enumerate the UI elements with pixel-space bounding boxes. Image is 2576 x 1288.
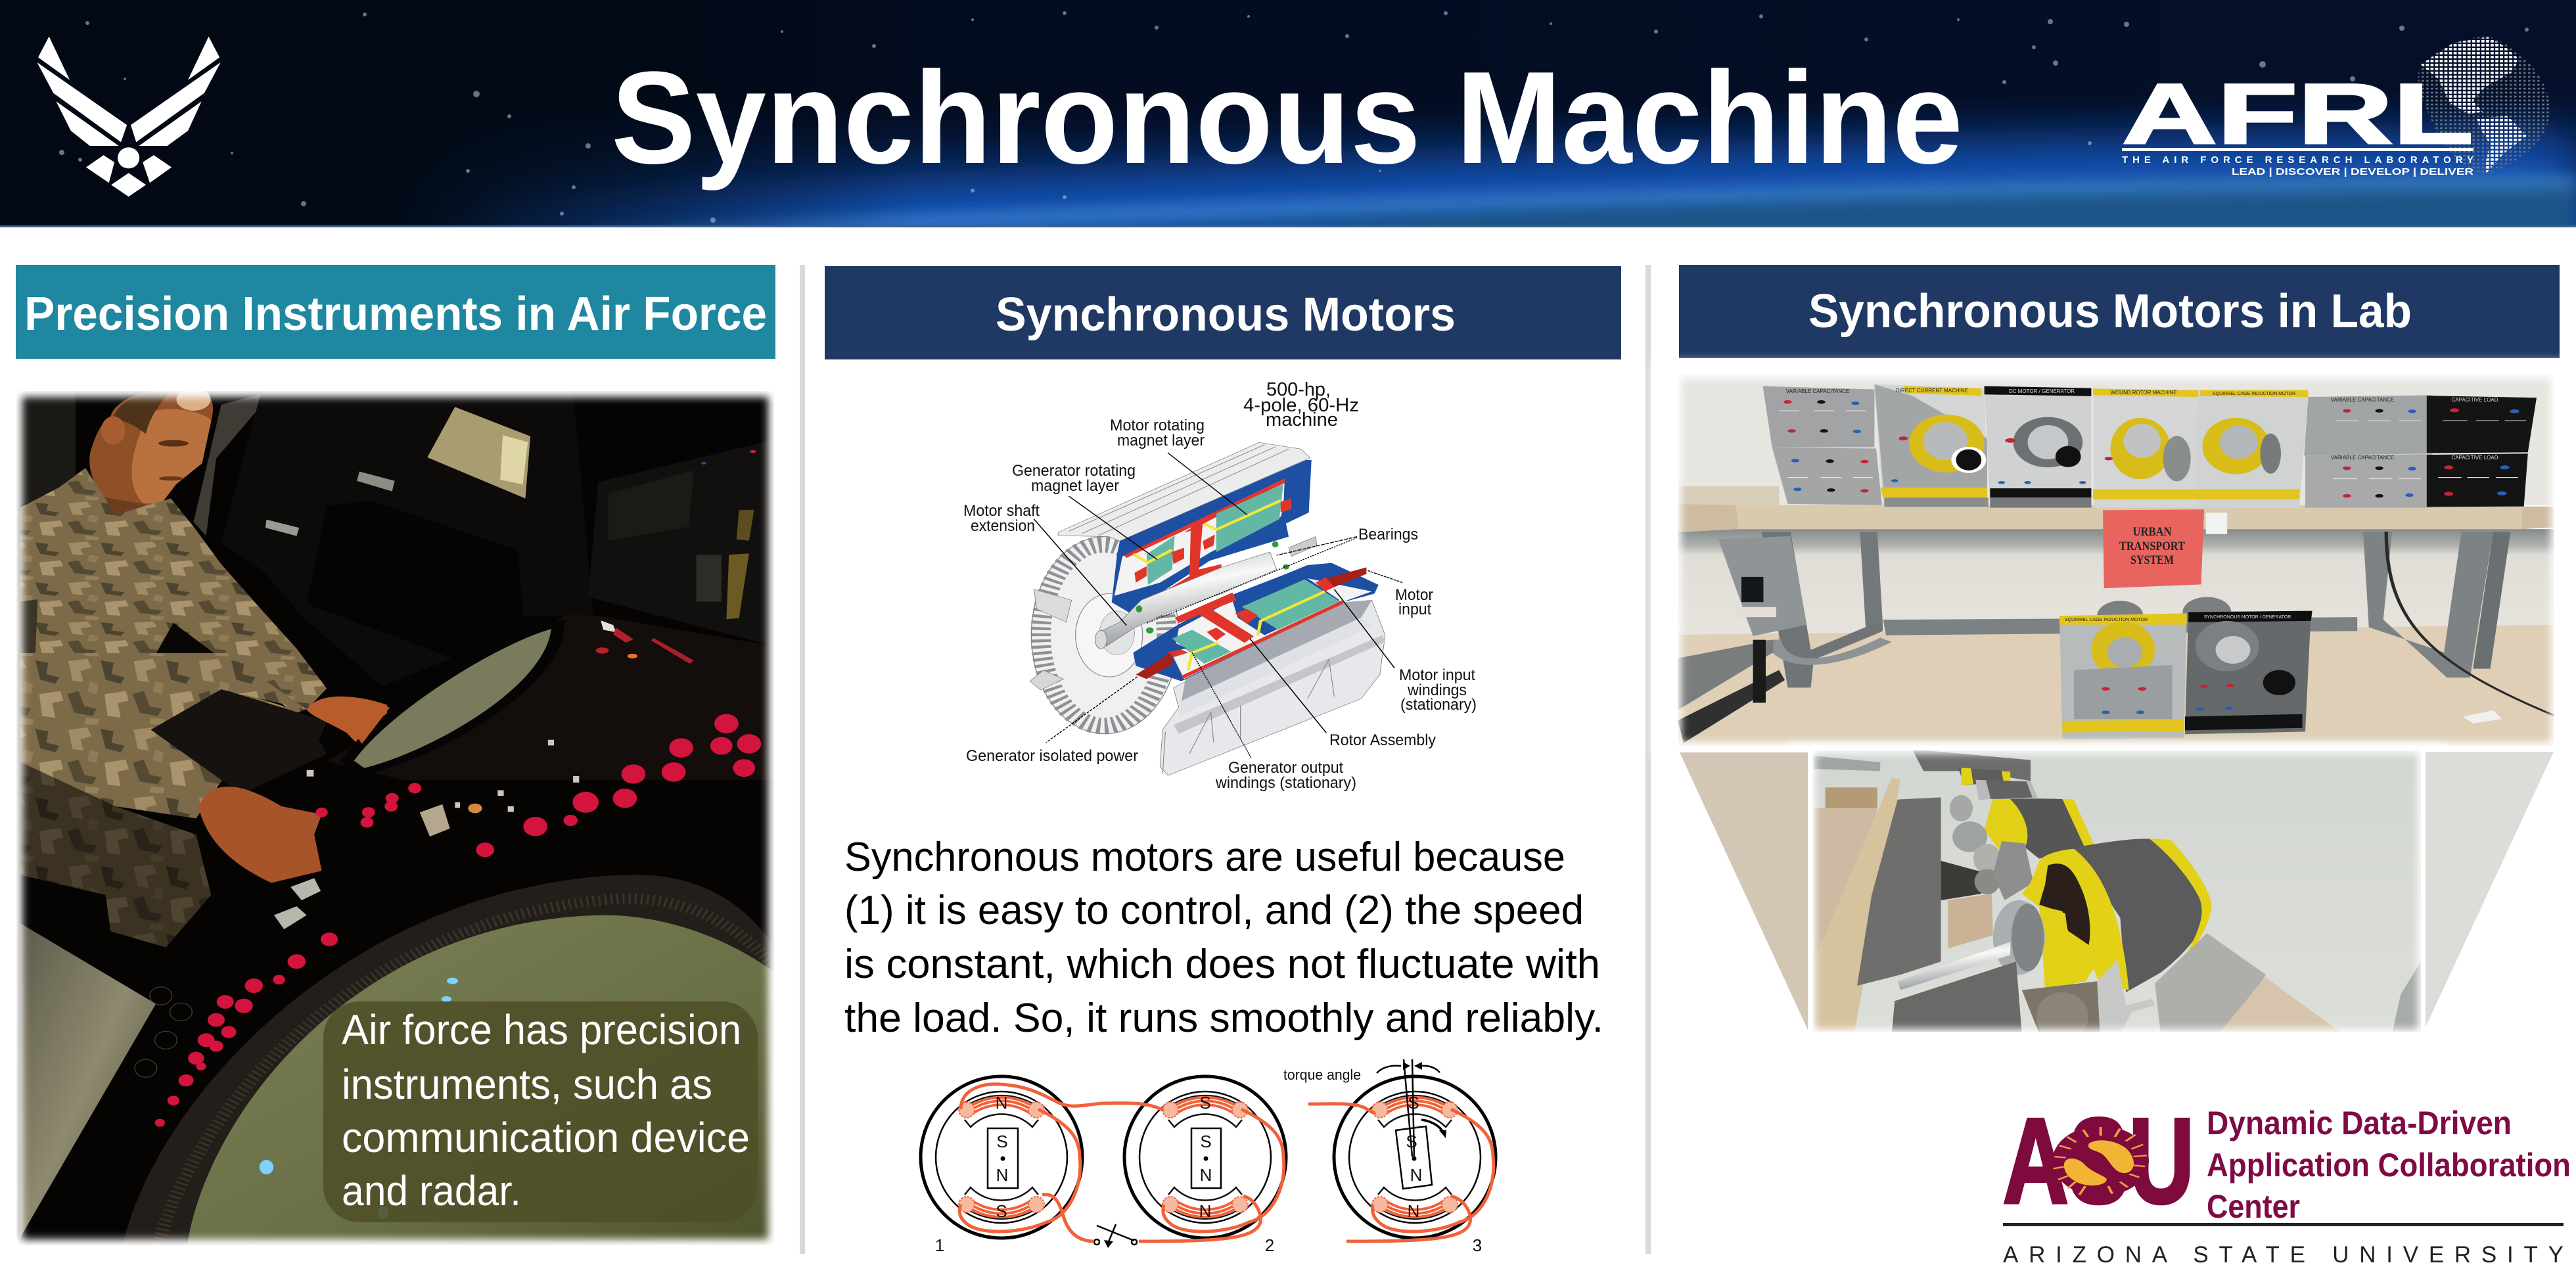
callout: air force caption <box>323 1001 758 1222</box>
text block: why synchronous motors are useful <box>844 835 1603 1041</box>
text block: why synchronous motors are useful: Synchronous motors are useful because <box>844 835 1565 880</box>
icon: ASU logo and center name <box>2003 1093 2571 1268</box>
diagram: motor cutaway: Bearings <box>1358 526 1418 543</box>
photo: lab bench with machines: WOUND ROTOR MACHINE <box>2110 390 2177 396</box>
photo: lab bench with machines: VARIABLE CAPACITANCE <box>2331 455 2394 461</box>
diagram: motor cutaway: windings (stationary) <box>1215 774 1356 792</box>
photo: lab bench with machines: DIRECT CURRENT MACHINE <box>1896 388 1968 394</box>
photo: motors viewed from the side <box>1680 745 2554 1058</box>
diagram: motor cutaway: Generator output <box>1228 759 1343 777</box>
diagram: three-stage rotor and torque angle: N <box>1408 1201 1419 1221</box>
text block: why synchronous motors are useful: is constant, which does not fluctuate with <box>844 942 1600 987</box>
diagram: motor cutaway <box>963 379 1477 792</box>
diagram: three-stage rotor and torque angle: N <box>1200 1165 1212 1185</box>
photo: lab bench with machines: SQUIRREL CAGE INDUCTION MOTOR <box>2065 618 2148 622</box>
diagram: motor cutaway: Motor rotating <box>1110 417 1205 434</box>
diagram: three-stage rotor and torque angle: N <box>1199 1201 1211 1221</box>
diagram: motor cutaway: input <box>1398 601 1431 618</box>
diagram: three-stage rotor and torque angle: S <box>996 1132 1008 1151</box>
icon: ASU logo and center name: ASU <box>2003 1093 2194 1228</box>
heading: synchronous motors <box>825 266 1621 359</box>
icon: ASU logo and center name: ARIZONA STATE UNIVERSITY <box>2003 1242 2564 1268</box>
icon: AFRL logo with dotted globe: LEAD | DISCOVER | DEVELOP | DELIVER <box>2232 166 2473 177</box>
panel: synchronous motors <box>825 266 1621 1255</box>
photo: lab bench with machines: VARIABLE CAPACITANCE <box>1786 388 1849 394</box>
icon: AFRL logo with dotted globe: THE AIR FORCE RESEARCH LABORATORY <box>2122 154 2473 166</box>
title: Synchronous Machine <box>611 45 1963 191</box>
heading: synchronous motors: Synchronous Motors <box>996 288 1456 341</box>
diagram: three-stage rotor and torque angle: S <box>1200 1132 1212 1151</box>
diagram: three-stage rotor and torque angle: N <box>1410 1165 1422 1185</box>
diagram: three-stage rotor and torque angle: N <box>996 1093 1007 1113</box>
diagram: motor cutaway: Motor <box>1395 586 1433 604</box>
diagram: motor cutaway: Motor input <box>1399 666 1475 684</box>
callout: air force caption: instruments, such as <box>342 1061 712 1108</box>
diagram: motor cutaway: magnet layer <box>1117 432 1205 449</box>
diagram: three-stage rotor and torque angle: N <box>996 1165 1008 1185</box>
diagram: three-stage rotor and torque angle: 2 <box>1265 1235 1274 1255</box>
photo: lab bench with machines: VARIABLE CAPACITANCE <box>2331 397 2394 403</box>
photo: lab bench with machines: CAPACITIVE LOAD <box>2452 455 2498 461</box>
diagram: three-stage rotor and torque angle <box>921 1059 1496 1255</box>
icon: ASU logo and center name: Dynamic Data-Driven <box>2207 1105 2512 1141</box>
icon: US Air Force wings logo <box>37 36 221 196</box>
diagram: motor cutaway: 500-hp, <box>1266 379 1331 400</box>
photo: lab bench with machines: SYSTEM <box>2130 553 2174 567</box>
icon: AFRL logo with dotted globe: AFRL <box>2122 66 2473 162</box>
diagram: three-stage rotor and torque angle: S <box>996 1201 1007 1221</box>
photo: lab bench with machines: DC MOTOR / GENERATOR <box>2009 388 2075 394</box>
diagram: motor cutaway: machine <box>1266 409 1338 430</box>
callout: air force caption: and radar. <box>342 1167 521 1214</box>
diagram: motor cutaway: Generator isolated power <box>966 747 1138 765</box>
panel: precision instruments in air force <box>0 265 792 1262</box>
diagram: three-stage rotor and torque angle: S <box>1199 1093 1211 1113</box>
photo: lab bench with machines: SYNCHRONOUS MOTOR / GENERATOR <box>2204 615 2291 620</box>
photo: lab bench with machines: SQUIRREL CAGE INDUCTION MOTOR <box>2213 392 2295 396</box>
diagram: three-stage rotor and torque angle: 1 <box>935 1235 944 1255</box>
photo: lab bench with machines <box>1653 361 2576 756</box>
diagram: three-stage rotor and torque angle: 3 <box>1473 1235 1482 1255</box>
header banner: space background <box>0 0 2576 227</box>
text block: why synchronous motors are useful: (1) it is easy to control, and (2) the speed <box>844 888 1584 933</box>
diagram: three-stage rotor and torque angle: S <box>1406 1132 1417 1151</box>
diagram: motor cutaway: extension <box>971 517 1035 535</box>
callout: air force caption: Air force has precision <box>342 1006 741 1053</box>
photo: lab bench with machines: CAPACITIVE LOAD <box>2452 397 2498 403</box>
photo: lab bench with machines: TRANSPORT <box>2119 540 2185 553</box>
photo: lab bench with machines: URBAN <box>2133 525 2172 539</box>
diagram: motor cutaway: magnet layer <box>1031 477 1119 495</box>
diagram: motor cutaway: Motor shaft <box>963 502 1040 520</box>
diagram: motor cutaway: windings <box>1407 681 1467 699</box>
text block: why synchronous motors are useful: the load. So, it runs smoothly and reliably. <box>844 996 1603 1041</box>
heading: synchronous motors in lab <box>1679 265 2560 358</box>
icon: ASU logo and center name: Center <box>2207 1188 2300 1225</box>
heading: precision instruments: Precision Instruments in Air Force <box>24 288 767 340</box>
heading: synchronous motors in lab: Synchronous Motors in Lab <box>1808 285 2412 338</box>
diagram: motor cutaway: 4-pole, 60-Hz <box>1243 395 1359 416</box>
diagram: three-stage rotor and torque angle: torque angle <box>1283 1067 1361 1083</box>
icon: AFRL logo with dotted globe <box>2122 36 2550 177</box>
divider right <box>1645 265 1651 1254</box>
divider left <box>800 265 805 1254</box>
diagram: motor cutaway: (stationary) <box>1400 696 1477 714</box>
callout: air force caption: communication device <box>342 1114 750 1161</box>
diagram: three-stage rotor and torque angle: S <box>1408 1093 1419 1113</box>
panel: synchronous motors in lab <box>1653 265 2576 1268</box>
diagram: motor cutaway: Rotor Assembly <box>1329 731 1436 749</box>
diagram: motor cutaway: Generator rotating <box>1012 462 1136 480</box>
photo: airman at radar console <box>0 375 792 1262</box>
heading: precision instruments <box>16 265 775 359</box>
